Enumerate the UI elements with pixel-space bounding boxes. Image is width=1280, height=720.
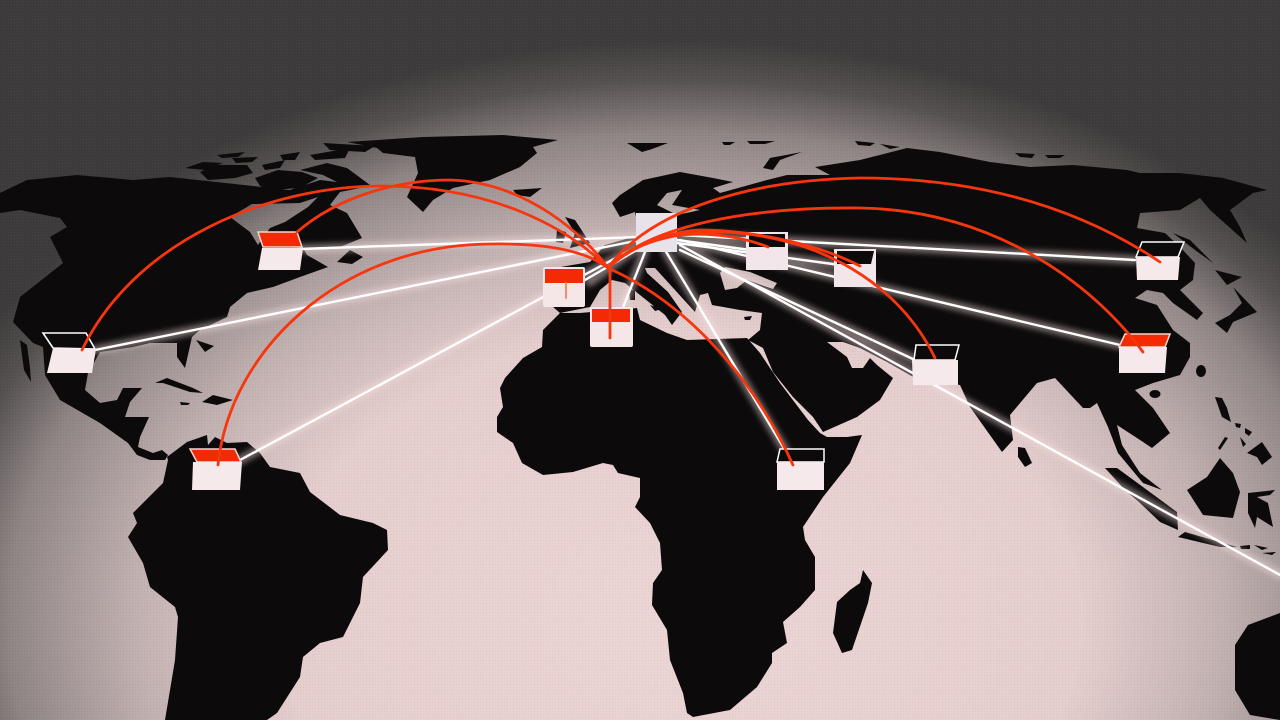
caribbean islands: [155, 250, 363, 405]
laptop: colombia: [190, 449, 242, 490]
laptop: north east asia: [1136, 242, 1184, 280]
uk and ireland: [556, 217, 590, 248]
madagascar: [833, 570, 872, 653]
laptop: iran: [912, 345, 959, 385]
eurasia: [543, 148, 1267, 490]
sri lanka: [1018, 447, 1032, 467]
laptop: east africa: [777, 449, 824, 490]
sulawesi: [1248, 490, 1275, 528]
canadian arctic islands: [185, 143, 375, 190]
iceland: [513, 188, 542, 197]
laptop: mexico: [43, 333, 96, 373]
australia: [1235, 613, 1280, 720]
philippines: [1215, 397, 1272, 465]
network lines from the hub: [95, 235, 1280, 575]
laptop: central europe hub: [636, 213, 677, 252]
laptop: algeria: [590, 307, 633, 347]
sumatra: [1105, 468, 1178, 530]
java and lesser islands: [1178, 532, 1276, 555]
baja california: [20, 340, 31, 382]
laptop: russia south: [834, 249, 876, 287]
taiwan and hainan: [1150, 365, 1206, 398]
africa: [497, 308, 862, 717]
sardinia and cyprus: [629, 289, 752, 320]
greenland: [347, 135, 558, 212]
japan and sakhalin: [1173, 233, 1257, 333]
white lines: [95, 235, 1280, 575]
arctic islands: [627, 141, 1065, 170]
south america: [128, 435, 388, 720]
laptop: eastern europe: [746, 232, 788, 270]
borneo: [1187, 458, 1240, 518]
laptop: spain: [543, 267, 585, 307]
north america: [0, 175, 365, 460]
laptop: china: [1119, 334, 1170, 373]
red connection arcs: [82, 178, 1160, 465]
laptop: north america east: [258, 232, 303, 270]
line glow: [95, 235, 1280, 575]
